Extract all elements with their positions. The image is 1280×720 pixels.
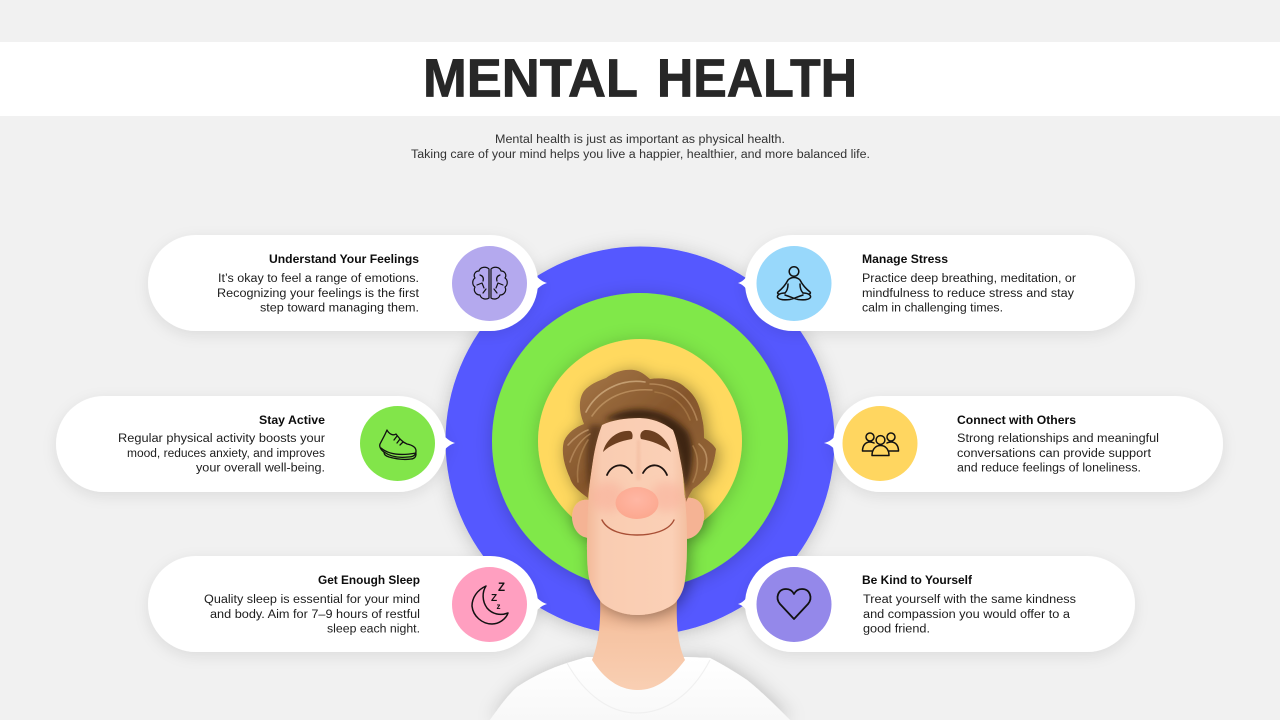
mouth xyxy=(602,520,674,535)
description: Treat yourself with the same kindness xyxy=(863,594,1076,606)
panel: manage stress xyxy=(738,235,1135,331)
description: Regular physical activity boosts your xyxy=(118,433,325,445)
concentric circles xyxy=(446,246,834,636)
hair xyxy=(563,370,716,502)
description xyxy=(957,433,1159,474)
description: sleep each night. xyxy=(327,624,420,636)
icon: moon and z xyxy=(452,567,527,642)
description: Recognizing your feelings is the first xyxy=(217,288,420,300)
description: mood, reduces anxiety, and improves xyxy=(127,448,325,460)
icon: people xyxy=(842,406,918,481)
title xyxy=(423,49,857,109)
icon: moon and z: Z xyxy=(491,593,497,604)
panel: get enough sleep xyxy=(148,556,547,652)
heading: Get Enough Sleep xyxy=(318,575,420,587)
title: MENTAL xyxy=(423,49,638,109)
description: and compassion you would offer to a xyxy=(863,609,1071,621)
description: Practice deep breathing, meditation, or xyxy=(862,273,1076,285)
nose xyxy=(616,487,658,519)
icon: meditation xyxy=(756,246,832,321)
heading: Be Kind to Yourself xyxy=(862,575,972,587)
panel: connect with others xyxy=(824,396,1223,492)
icon: moon and z: z xyxy=(496,602,500,611)
icon: heart xyxy=(756,567,832,642)
title banner xyxy=(0,42,1280,116)
head group with hair xyxy=(563,370,716,615)
panel: be kind to yourself xyxy=(738,556,1135,652)
description xyxy=(204,594,420,636)
description: your overall well-being. xyxy=(196,462,325,474)
cheeks xyxy=(591,482,625,512)
description xyxy=(118,433,325,474)
description: Strong relationships and meaningful xyxy=(957,433,1159,445)
description xyxy=(862,273,1076,314)
hair shading xyxy=(568,381,707,495)
character illustration xyxy=(490,370,790,720)
nose bridge xyxy=(636,440,641,480)
subtitle text xyxy=(411,134,870,161)
icon: moon and z: Z xyxy=(498,582,505,594)
description xyxy=(217,273,420,314)
panel: stay active xyxy=(56,396,455,492)
heading: Understand Your Feelings xyxy=(269,254,419,266)
description: It’s okay to feel a range of emotions. xyxy=(218,273,419,285)
icon: brain xyxy=(452,246,527,321)
heading: Stay Active xyxy=(259,415,325,427)
description: step toward managing them. xyxy=(260,302,419,314)
description: calm in challenging times. xyxy=(862,302,1003,314)
eyebrows xyxy=(603,431,633,452)
eyes xyxy=(607,465,632,475)
subtitle text: Mental health is just as important as physical health. xyxy=(495,134,785,146)
description xyxy=(863,594,1076,636)
collar line xyxy=(567,660,710,713)
description: conversations can provide support xyxy=(957,448,1152,460)
heading: Manage Stress xyxy=(862,254,948,266)
description: good friend. xyxy=(863,624,930,636)
panel: understand your feelings xyxy=(148,235,547,331)
ears xyxy=(572,500,590,538)
shirt xyxy=(490,657,790,720)
icon: running shoe xyxy=(360,406,435,481)
description: mindfulness to reduce stress and stay xyxy=(862,288,1074,300)
head xyxy=(587,410,687,615)
description: and reduce feelings of loneliness. xyxy=(957,462,1141,474)
subtitle text: Taking care of your mind helps you live a happier, healthier, and more balanced life. xyxy=(411,149,870,161)
neck xyxy=(592,600,685,690)
heading: Connect with Others xyxy=(957,415,1076,427)
description: Quality sleep is essential for your mind xyxy=(204,594,420,606)
title: HEALTH xyxy=(657,49,857,109)
description: and body. Aim for 7–9 hours of restful xyxy=(210,609,420,621)
